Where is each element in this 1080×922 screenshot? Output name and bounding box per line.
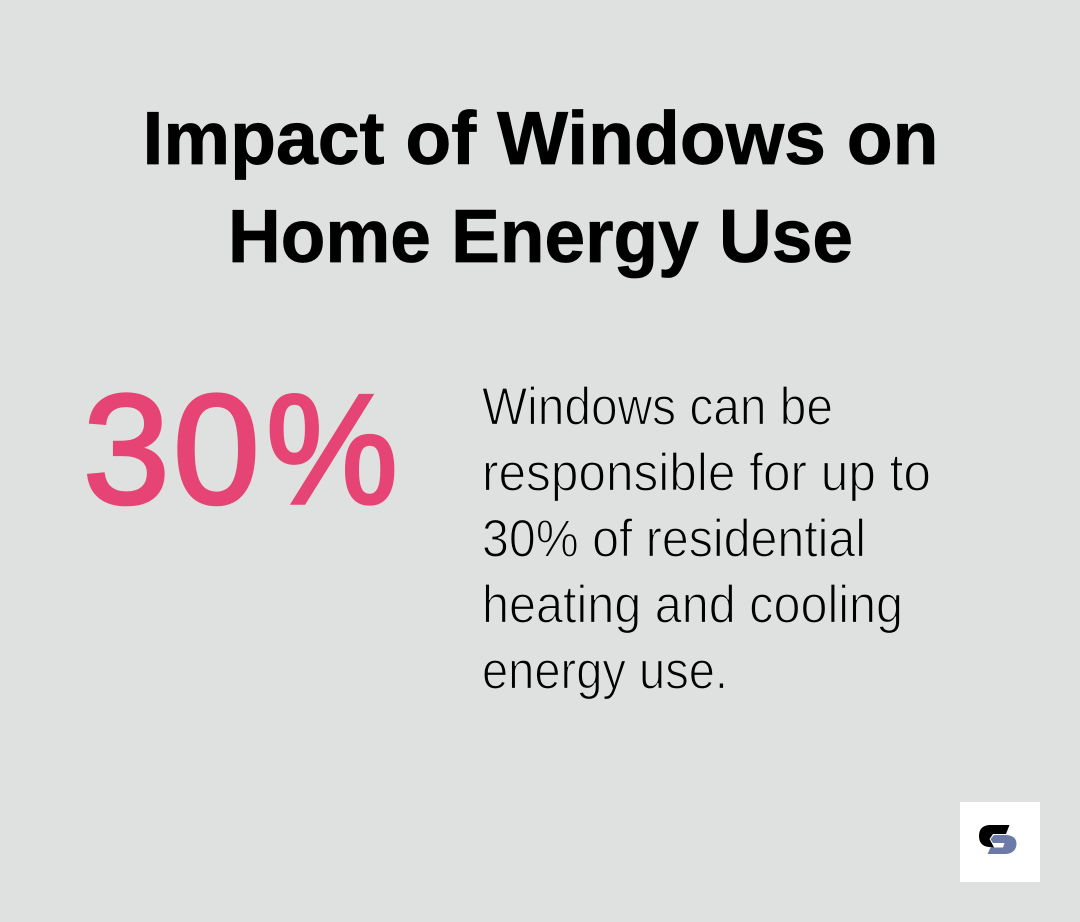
big statistic: 30%: 0 — [173, 363, 260, 537]
description text: Windows can be — [482, 378, 833, 436]
big statistic: 30%: 3 — [83, 363, 170, 537]
title: Home Energy Use — [228, 194, 853, 278]
title — [142, 96, 938, 278]
title: Impact of Windows on — [142, 96, 938, 180]
description text: heating and cooling — [482, 576, 903, 634]
description text — [482, 378, 931, 700]
description text: responsible for up to — [482, 444, 931, 502]
logo badge — [960, 802, 1040, 882]
big statistic: 30%: % — [266, 363, 398, 537]
description text: energy use. — [482, 642, 728, 700]
description text: 30% of residential — [482, 510, 866, 568]
